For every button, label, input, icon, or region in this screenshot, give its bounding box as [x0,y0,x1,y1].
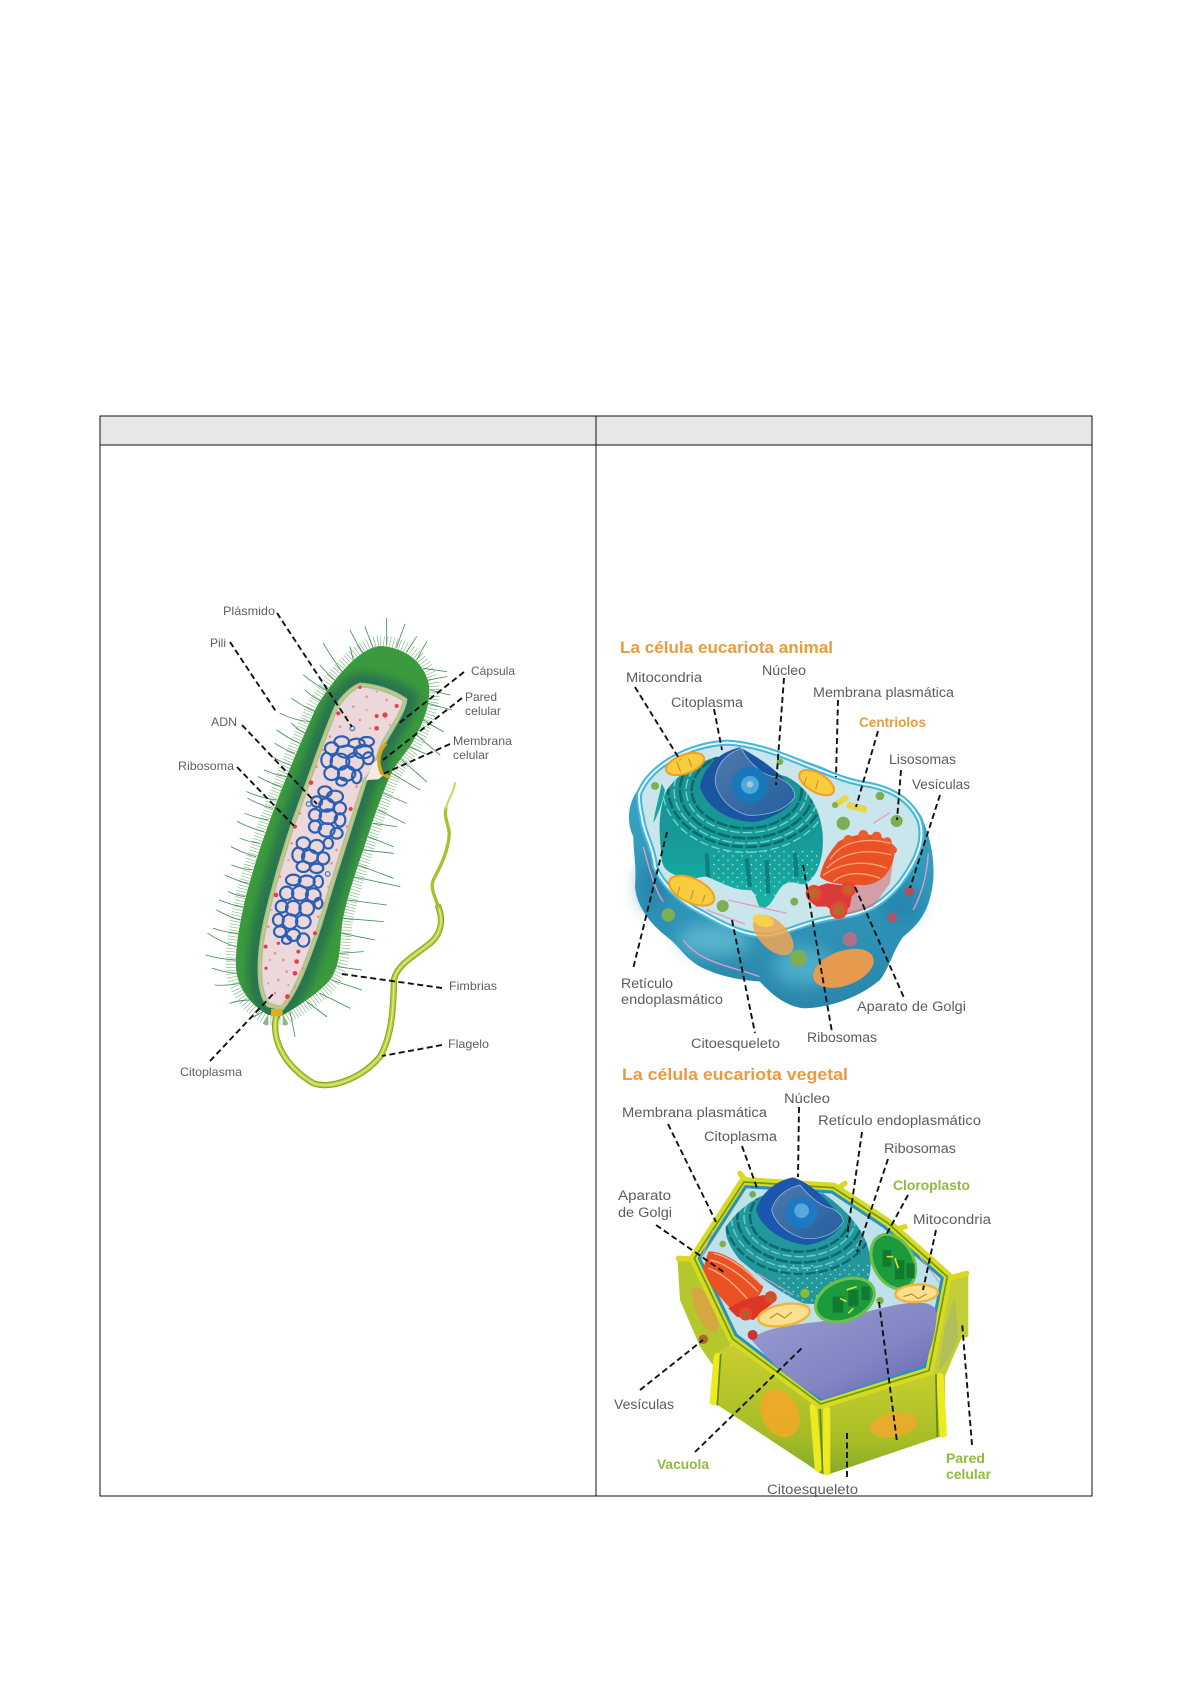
label: Membrana celular: celular [453,748,489,762]
label: Vesículas: Vesículas [912,777,970,792]
table header right cell [596,416,1092,445]
mitochondria [757,1284,938,1330]
flagellum [271,783,455,1085]
label: Plásmido: Plásmido [223,604,275,618]
label: Ribosomas: Ribosomas [807,1030,877,1045]
cell interior [695,1183,947,1403]
illustration: animal cell [629,724,934,1008]
label: Pared celular [465,690,501,718]
cytoplasm surface [639,743,921,936]
filaments [702,1230,940,1295]
label: Citoplasma: Citoplasma [671,695,744,710]
cytoskeleton filaments [643,813,928,977]
panel: plant cell [614,1065,992,1497]
golgi apparatus [807,830,897,917]
lysosomes and vesicles [651,758,914,967]
table [100,416,1092,445]
cut notch [366,758,384,780]
leader lines: plant cell [640,1107,972,1477]
chloroplast shadows in wall [687,1284,919,1444]
submerged organelles [746,907,879,995]
wall ribs [678,1173,967,1473]
golgi apparatus [703,1252,777,1320]
label: Pared celular [946,1450,992,1482]
label: Pared celular: celular [465,704,501,718]
illustration: plant cell [677,1159,968,1475]
page diagram [100,416,1092,1497]
heading: animal cell: La célula eucariota animal [620,638,833,657]
label: Retículo endoplasmático: endoplasmático [621,992,723,1007]
centrioles [832,794,868,813]
nucleus [756,1177,843,1245]
label: Lisosomas: Lisosomas [889,752,956,767]
cell wall and membrane [260,685,405,1008]
label: Pared celular: celular [946,1466,992,1482]
label: Pili: Pili [210,636,226,650]
label: Cápsula: Cápsula [471,664,515,678]
label: Ribosoma: Ribosoma [178,759,234,773]
pili [206,618,452,1037]
leader lines: bacterium [210,613,464,1061]
ribosomes [264,686,399,999]
cut wall yellow [379,743,390,778]
table header left cell [100,416,596,445]
label: Aparato de Golgi: Aparato de Golgi [857,999,966,1014]
label: Cloroplasto: Cloroplasto [893,1177,970,1193]
label: Núcleo: Núcleo [784,1091,830,1106]
label: Retículo endoplasmático [621,976,723,1007]
label: Ribosomas: Ribosomas [884,1141,956,1156]
label: Membrana plasmática: Membrana plasmática [622,1105,768,1120]
chloroplasts [809,1227,925,1330]
leader lines: animal cell [633,678,940,1033]
label: Citoesqueleto: Citoesqueleto [767,1482,858,1497]
front right wall [820,1368,945,1475]
illustration: bacterium [206,618,455,1085]
label: Citoesqueleto: Citoesqueleto [691,1036,780,1051]
label: Aparato de Golgi: de Golgi [618,1205,672,1220]
label: Citoplasma: Citoplasma [704,1129,778,1144]
vacuole [752,1303,937,1399]
panel: prokaryotic cell [178,604,515,1085]
heading: plant cell: La célula eucariota vegetal [622,1065,848,1084]
label: Pared celular: Pared [946,1450,985,1466]
label: Vacuola: Vacuola [657,1456,709,1472]
front left wall [715,1343,820,1473]
right wall glass panel [938,1297,958,1370]
label: Fimbrias: Fimbrias [449,979,497,993]
vesicles [719,1191,884,1340]
endoplasmic reticulum [653,756,823,908]
left side wall [677,1257,737,1368]
endoplasmic reticulum [726,1193,871,1304]
label: Flagelo: Flagelo [448,1037,489,1051]
short fimbriae halo [236,646,429,1015]
label: Pared celular: Pared [465,690,497,704]
right side wall [928,1272,968,1377]
capsule [236,646,429,1015]
label: Aparato de Golgi [618,1188,672,1220]
label: ADN: ADN [211,715,237,729]
label: Centriolos: Centriolos [859,714,926,730]
label: Membrana celular [453,734,512,762]
plasmids [306,726,355,876]
cell body [629,741,934,1008]
capsule shading [260,685,405,1008]
DNA [273,736,374,947]
panel: animal cell [620,638,970,1051]
nucleus [700,747,795,822]
body highlights [638,860,920,987]
label: Mitocondria: Mitocondria [913,1212,992,1227]
label: Mitocondria: Mitocondria [626,670,703,685]
mitochondria [663,748,838,912]
label: Vesículas: Vesículas [614,1397,674,1412]
label: Citoplasma: Citoplasma [180,1065,242,1079]
label: Membrana plasmática: Membrana plasmática [813,685,955,700]
label: Aparato de Golgi: Aparato [618,1188,671,1203]
label: Membrana celular: Membrana [453,734,512,748]
label: Retículo endoplasmático: Retículo [621,976,673,991]
label: Retículo endoplasmático: Retículo endoplasmático [818,1113,981,1128]
label: Núcleo: Núcleo [762,663,806,678]
